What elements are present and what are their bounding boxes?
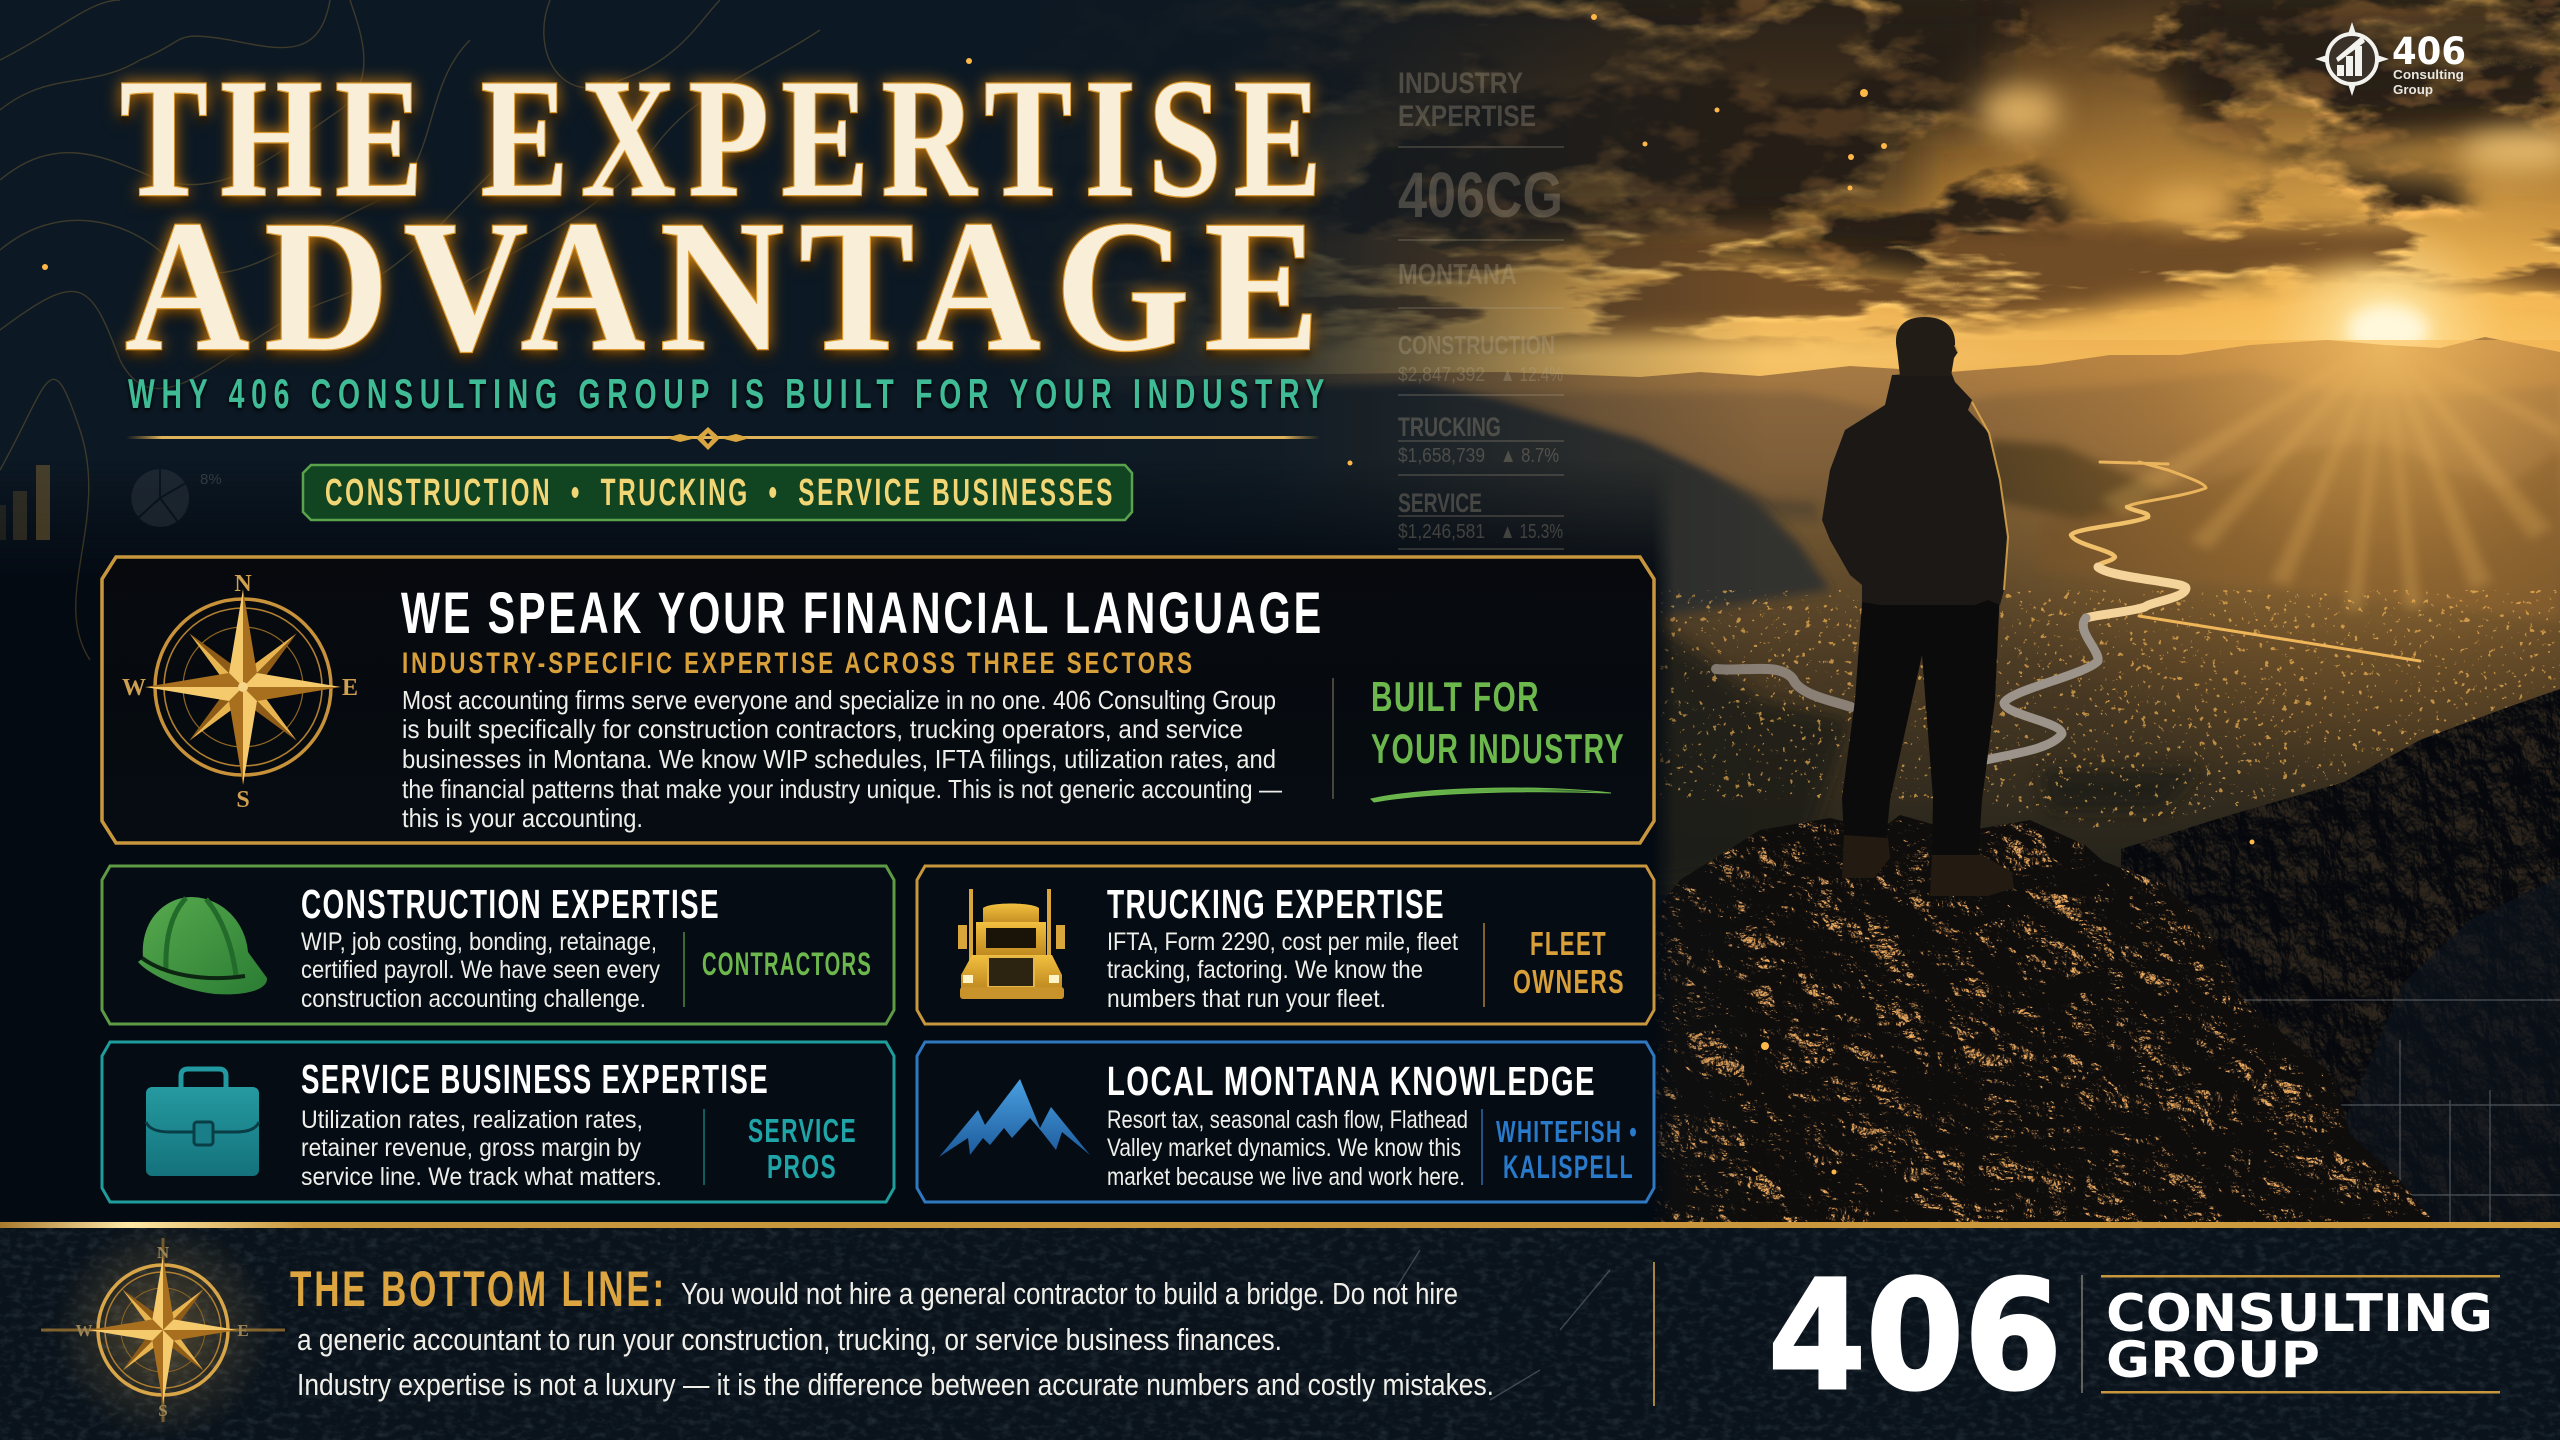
card body xyxy=(301,1106,662,1191)
panel: construction expertise xyxy=(102,866,894,1024)
faint data ledger overlay: CONSTRUCTION xyxy=(1398,330,1555,360)
brand lockup: 406 Consulting Group: GROUP xyxy=(2106,1331,2320,1389)
bottom line text: You would not hire a general contractor to build a bridge. Do not hire xyxy=(681,1276,1458,1311)
card body: market because we live and work here. xyxy=(1107,1163,1465,1191)
card tag xyxy=(748,1112,857,1185)
faint data ledger overlay: $1,658,739 xyxy=(1398,445,1485,467)
dark storm clouds xyxy=(1000,0,2560,290)
slate texture xyxy=(0,1228,2560,1440)
built for your industry callout xyxy=(1371,673,1625,802)
card tag: CONTRACTORS xyxy=(702,946,872,982)
logo number: 406 xyxy=(2392,30,2466,73)
panel: local montana knowledge xyxy=(917,1042,1654,1202)
man silhouette xyxy=(1822,317,2014,896)
card body: Resort tax, seasonal cash flow, Flathead xyxy=(1107,1106,1468,1134)
head xyxy=(1896,317,1958,376)
title: THE EXPERTISE xyxy=(120,44,1334,232)
card body: retainer revenue, gross margin by xyxy=(301,1134,641,1162)
brand lockup: 406 Consulting Group: 406 xyxy=(1768,1248,2062,1424)
faint data ledger overlay: ▲ 15.3% xyxy=(1500,521,1563,543)
ornamental divider xyxy=(126,427,1320,450)
icon: yellow semi truck xyxy=(958,889,1065,999)
sunset sky xyxy=(1000,0,2560,420)
jacket xyxy=(1822,372,2008,605)
logo compass mark xyxy=(2315,22,2389,96)
navy overlay fading into photo xyxy=(0,0,1900,1230)
photo: man on a mountain overlooking a Montana valley at sunset xyxy=(1000,0,2560,1245)
sunlit haze xyxy=(1900,340,2560,820)
title: ADVANTAGE xyxy=(125,181,1334,390)
card body: service line. We track what matters. xyxy=(301,1163,662,1191)
faint chart motifs xyxy=(0,465,222,540)
mid ridge xyxy=(1000,370,2560,640)
card tag: WHITEFISH • xyxy=(1496,1114,1638,1149)
card body: certified payroll. We have seen every xyxy=(301,956,660,984)
icon: gold compass: W xyxy=(122,675,146,701)
faint data ledger overlay: ▲ 12.4% xyxy=(1500,364,1563,386)
card tag: KALISPELL xyxy=(1503,1149,1634,1185)
panel body text: is built specifically for construction contractors, trucking operators, and service xyxy=(402,714,1243,744)
panel body text: Most accounting firms serve everyone and specialize in no one. 406 Consulting Group xyxy=(402,685,1276,715)
faint data ledger overlay: TRUCKING xyxy=(1398,412,1501,442)
boots xyxy=(1842,835,2014,896)
panel body text: the financial patterns that make your industry unique. This is not generic accounting — xyxy=(402,774,1282,804)
subtitle: WHY 406 CONSULTING GROUP IS BUILT FOR YOUR INDUSTRY xyxy=(128,370,1331,417)
gold rule xyxy=(0,1222,2560,1228)
faint data ledger overlay: MONTANA xyxy=(1398,259,1517,291)
rim light xyxy=(1955,345,2008,590)
card tag xyxy=(1496,1114,1638,1185)
faint data ledger overlay: SERVICE xyxy=(1398,488,1482,518)
icon: green hard hat xyxy=(138,897,267,994)
rocky outcrop xyxy=(1640,815,2440,1230)
card body xyxy=(301,928,660,1013)
panel: trucking expertise xyxy=(917,866,1654,1024)
icon: glowing compass: W xyxy=(76,1321,92,1340)
topographic contour lines xyxy=(0,0,820,660)
sun glow xyxy=(1800,0,2560,500)
legs xyxy=(1842,590,2000,860)
distant ridge xyxy=(1000,337,2560,650)
icon: glowing compass: E xyxy=(237,1321,249,1340)
soft ridges and hills xyxy=(1000,370,2560,720)
icon: blue mountains xyxy=(939,1079,1090,1157)
bottom line text: Industry expertise is not a luxury — it is the difference between accurate numbers and costly mistakes. xyxy=(297,1367,1494,1402)
brand lockup: 406 Consulting Group xyxy=(1768,1248,2500,1424)
faint data ledger overlay: EXPERTISE xyxy=(1398,100,1536,133)
panel heading: WE SPEAK YOUR FINANCIAL LANGUAGE xyxy=(401,581,1324,646)
bottom line text: a generic accountant to run your construction, trucking, or service business finances. xyxy=(297,1322,1282,1357)
right valley hills xyxy=(2040,442,2560,620)
middle hill xyxy=(1990,440,2170,520)
dark cloud shading xyxy=(1000,0,2560,220)
soft foreground hills xyxy=(1000,385,2560,640)
panel body text: this is your accounting. xyxy=(402,803,643,833)
sun disc xyxy=(2348,306,2428,354)
title xyxy=(120,44,1334,390)
panel: we speak your financial language xyxy=(102,557,1654,843)
icon: gold compass: S xyxy=(236,787,250,813)
built for your industry callout: BUILT FOR xyxy=(1371,673,1540,720)
lower right ridge xyxy=(2300,877,2560,1230)
bottom line text xyxy=(297,1276,1494,1402)
lower dark backdrop xyxy=(0,460,1700,1230)
sunlit cloud patches xyxy=(1980,86,2560,219)
panel subheading: INDUSTRY-SPECIFIC EXPERTISE ACROSS THREE SECTORS xyxy=(402,647,1195,680)
lit low clouds xyxy=(1000,225,2560,340)
logo: 406 Consulting Group (top right) xyxy=(2315,22,2466,97)
logo wordmark: Consulting xyxy=(2393,67,2464,82)
faint data ledger overlay: $2,847,392 xyxy=(1398,364,1485,386)
logo: 406 Consulting Group (top right): Group xyxy=(2393,82,2433,97)
left mountain xyxy=(1000,385,1850,720)
icon: gold compass xyxy=(122,571,358,813)
band background xyxy=(0,1228,2560,1440)
forest shade xyxy=(1650,620,2200,880)
sun rays xyxy=(2100,338,2560,612)
card heading: CONSTRUCTION EXPERTISE xyxy=(301,881,720,927)
faint data ledger overlay: ▲ 8.7% xyxy=(1500,445,1559,467)
card heading: TRUCKING EXPERTISE xyxy=(1107,881,1445,927)
card tag xyxy=(1513,925,1625,1000)
card tag: OWNERS xyxy=(1513,963,1625,1000)
faint pie chart xyxy=(130,468,190,528)
ledger heading: INDUSTRY xyxy=(1398,67,1523,100)
brand lockup: 406 Consulting Group: CONSULTING xyxy=(2106,1284,2493,1344)
card body: Utilization rates, realization rates, xyxy=(301,1106,643,1134)
industries badge: CONSTRUCTION • TRUCKING • SERVICE BUSINESSES xyxy=(325,472,1115,514)
card body: numbers that run your fleet. xyxy=(1107,985,1386,1013)
survey grid lines xyxy=(2160,1000,2560,1245)
panel body text xyxy=(402,685,1282,833)
card body: tracking, factoring. We know the xyxy=(1107,956,1423,984)
left mountain foreground shade xyxy=(1000,385,1830,640)
icon: teal briefcase xyxy=(146,1069,259,1176)
industries badge xyxy=(303,465,1132,520)
faint data ledger overlay: $1,246,581 xyxy=(1398,521,1485,543)
right mountain slope xyxy=(2121,689,2560,1230)
card tag: FLEET xyxy=(1530,925,1607,962)
card tag: SERVICE xyxy=(748,1112,857,1149)
valley floor xyxy=(1000,470,2560,895)
bottom line band xyxy=(0,1220,2560,1440)
icon: glowing compass: N xyxy=(157,1243,170,1262)
faint data ledger overlay: 406CG xyxy=(1398,159,1563,231)
faint pie labels: 8% xyxy=(200,471,222,488)
icon: glowing compass: S xyxy=(158,1401,168,1420)
glowing embers xyxy=(42,14,2254,1174)
card body: IFTA, Form 2290, cost per mile, fleet xyxy=(1107,928,1458,956)
faint data ledger overlay xyxy=(1398,67,1564,549)
card heading: SERVICE BUSINESS EXPERTISE xyxy=(301,1056,769,1102)
built for your industry callout: YOUR INDUSTRY xyxy=(1371,725,1625,772)
panel: service business expertise xyxy=(102,1042,894,1202)
card body xyxy=(1107,1106,1468,1191)
icon: glowing compass xyxy=(41,1220,285,1440)
slate scratches xyxy=(1395,1250,1610,1400)
card body xyxy=(1107,928,1458,1013)
card tag: PROS xyxy=(767,1148,837,1185)
panel body text: businesses in Montana. We know WIP schedules, IFTA filings, utilization rates, and xyxy=(402,744,1276,774)
card body: Valley market dynamics. We know this xyxy=(1107,1134,1461,1162)
card body: WIP, job costing, bonding, retainage, xyxy=(301,928,657,956)
faint bar chart xyxy=(0,465,50,540)
bottom line label: THE BOTTOM LINE: xyxy=(290,1261,667,1317)
card body: construction accounting challenge. xyxy=(301,985,646,1013)
icon: gold compass: N xyxy=(234,571,252,597)
panel frame xyxy=(102,557,1654,843)
river xyxy=(1716,462,2420,760)
card heading: LOCAL MONTANA KNOWLEDGE xyxy=(1107,1058,1596,1104)
icon: gold compass: E xyxy=(342,675,358,701)
city lights xyxy=(1660,590,2560,830)
